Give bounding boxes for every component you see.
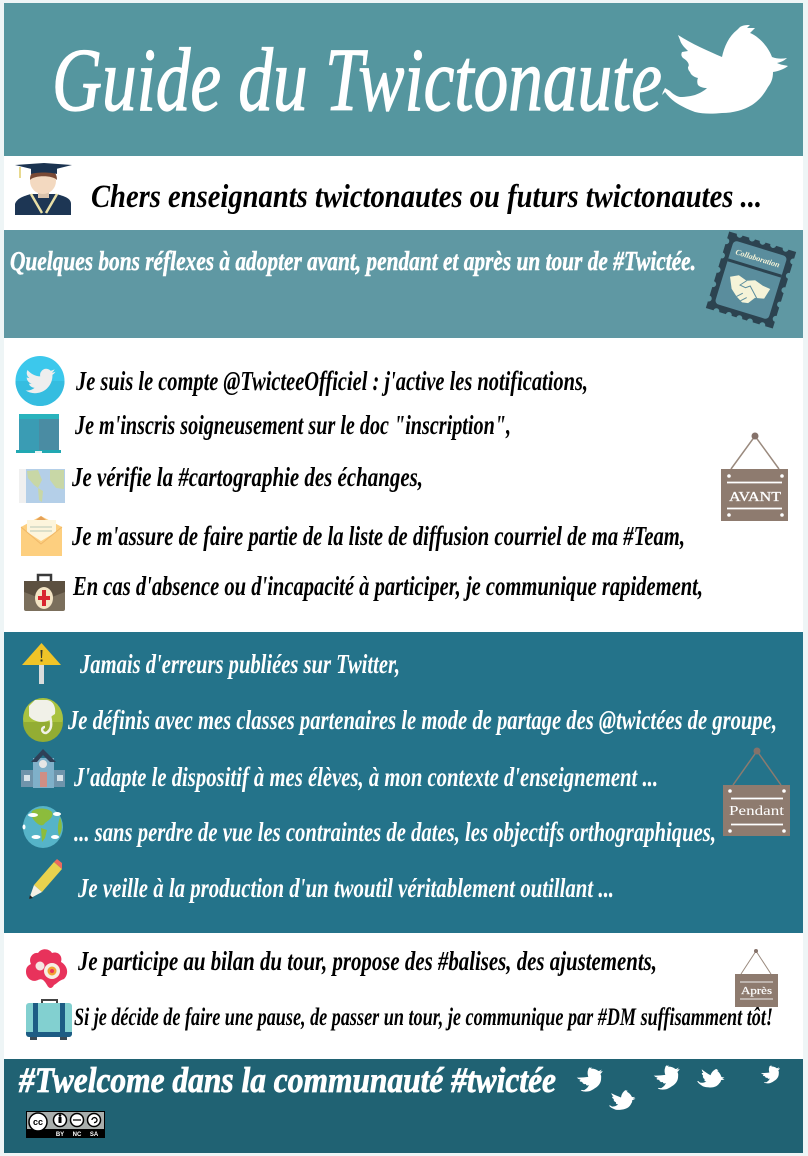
icon: avant sign: AVANT <box>729 489 782 504</box>
item text: Je veille à la production d'un twoutil véritablement outillant ... <box>77 873 614 903</box>
badge: creative commons: BY <box>56 1132 64 1138</box>
icon: teal book <box>16 414 61 453</box>
icon: warning sign <box>22 643 61 684</box>
icon: globe <box>22 806 63 848</box>
icon: map <box>19 469 65 503</box>
icon: large white bird <box>662 25 788 114</box>
panel: greeting <box>4 156 803 230</box>
panel: pendant <box>4 632 803 933</box>
badge: creative commons <box>26 1111 105 1138</box>
icon: collaboration stamp: Collaboration <box>734 247 781 270</box>
panel: après <box>4 933 803 1059</box>
icon: twitter circle <box>16 356 64 406</box>
icon: pendant sign: Pendant <box>729 804 784 819</box>
icon: school <box>21 749 65 788</box>
badge: creative commons: SA <box>90 1132 99 1138</box>
icon: suitcase <box>26 1000 72 1040</box>
icon: après sign: Après <box>741 986 772 997</box>
icon: evernote elephant <box>23 698 63 742</box>
item text: Je m'inscris soigneusement sur le doc "inscription", <box>74 410 511 440</box>
icon: envelope <box>21 516 62 556</box>
badge: creative commons: NC <box>73 1132 82 1138</box>
icon: pendant sign <box>723 748 790 836</box>
icon: flower <box>26 949 67 988</box>
icon: avant sign <box>721 432 788 521</box>
panel: footer <box>4 1059 803 1153</box>
panel: avant <box>4 338 803 632</box>
icon: graduate <box>15 163 72 215</box>
icons: small birds <box>573 1061 784 1110</box>
panel: header <box>4 3 803 156</box>
icon: collaboration stamp <box>702 228 800 332</box>
item text: Je suis le compte @TwicteeOfficiel : j'active les notifications, <box>75 366 588 396</box>
panel: intro banner <box>4 228 803 338</box>
footer text: #Twelcome dans la communauté #twictée <box>18 1060 556 1100</box>
icon: après sign <box>735 949 778 1007</box>
badge: creative commons: cc <box>33 1117 43 1127</box>
icon: pencil <box>29 859 62 899</box>
item text: Jamais d'erreurs publiées sur Twitter, <box>79 649 400 679</box>
item text: Je participe au bilan du tour, propose des #balises, des ajustements, <box>77 946 657 976</box>
item text: Je vérifie la #cartographie des échanges, <box>71 462 423 492</box>
icon: first aid briefcase <box>24 575 65 611</box>
